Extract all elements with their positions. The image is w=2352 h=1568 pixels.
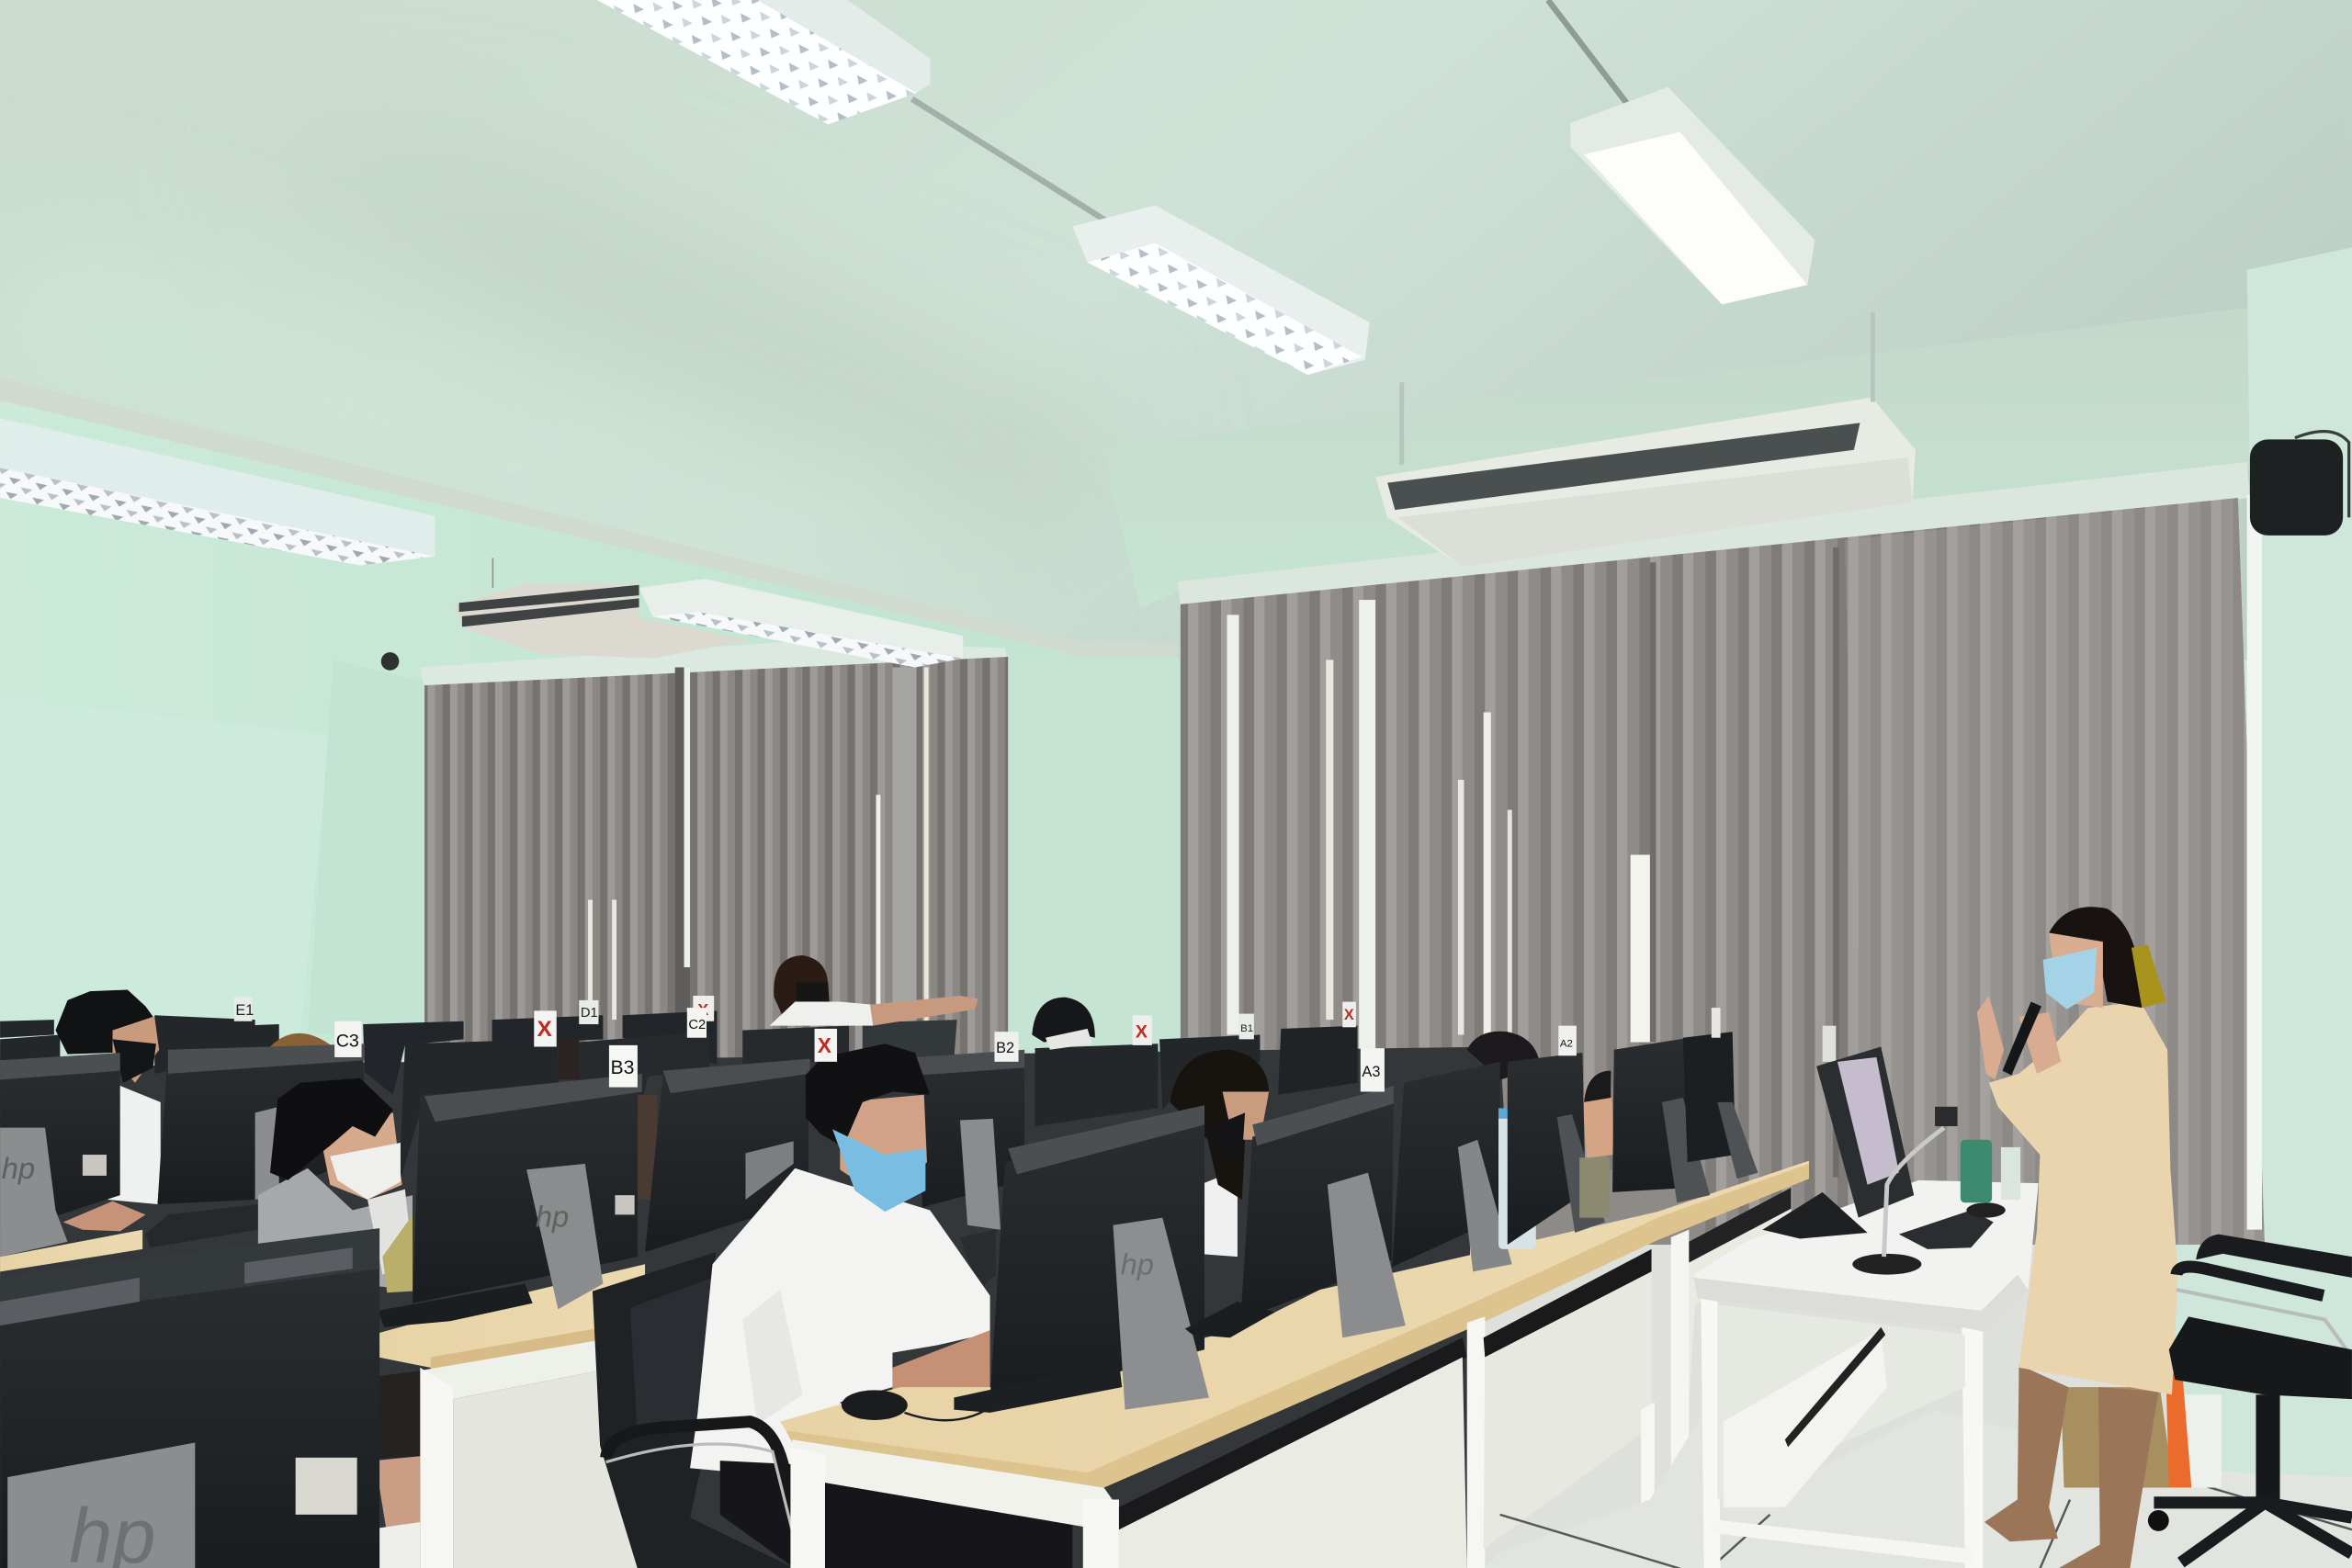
chair: front man bbox=[593, 1252, 795, 1568]
row labels: E1 bbox=[235, 1002, 254, 1019]
curtain right bbox=[1181, 498, 2265, 1252]
row labels: X bbox=[1344, 1007, 1354, 1023]
person: front man bbox=[690, 1043, 1072, 1568]
ceiling light 1 bbox=[597, 0, 930, 125]
clear water bottle bbox=[1498, 1108, 1536, 1249]
microphone stand bbox=[1852, 1107, 1958, 1275]
back row monitors bbox=[0, 1010, 1358, 1185]
person: standing woman at back bbox=[770, 955, 978, 1026]
lighter ceiling left edge bbox=[0, 240, 1050, 615]
row labels: B3 bbox=[611, 1057, 634, 1078]
teacher desk bbox=[1693, 1180, 2039, 1568]
person: man at left bbox=[55, 989, 161, 1231]
right pillar bbox=[2175, 247, 2352, 1477]
monitor: near right 1 bbox=[954, 1105, 1209, 1413]
monitor: near right 1: hp bbox=[1121, 1247, 1154, 1281]
floor bbox=[1485, 1402, 2352, 1568]
teacher face bbox=[2049, 932, 2103, 1008]
row labels: X bbox=[818, 1033, 832, 1057]
ceiling light 2 bbox=[1072, 206, 1370, 375]
teacher bbox=[1977, 907, 2178, 1568]
row labels: B2 bbox=[996, 1040, 1014, 1056]
row labels: X bbox=[1136, 1022, 1148, 1043]
row labels: B1 bbox=[1240, 1023, 1253, 1034]
row labels: X bbox=[537, 1017, 553, 1042]
row labels: D1 bbox=[581, 1006, 598, 1021]
left valance bbox=[420, 642, 1008, 687]
teacher hair bbox=[2049, 907, 2142, 1008]
air conditioner left bbox=[453, 558, 750, 659]
ceiling light 3 bbox=[1570, 87, 1815, 304]
chair armrest bbox=[606, 1422, 792, 1529]
monitor: near right 3 bbox=[1392, 1062, 1512, 1271]
row labels: C2 bbox=[688, 1018, 706, 1032]
floor base bbox=[1470, 1245, 2175, 1568]
upper wall right bbox=[1102, 308, 2257, 607]
front-left monitor bbox=[0, 1228, 379, 1568]
row labels: X bbox=[697, 1000, 708, 1019]
dark fill behind the monitors and desks bbox=[0, 1047, 1508, 1568]
ceiling shadow band bbox=[210, 135, 1140, 555]
lower left wall bbox=[0, 393, 1185, 1079]
centre pillar bbox=[1008, 660, 1182, 1079]
monitor row 3: centre left: hp bbox=[536, 1199, 569, 1233]
green bottle bbox=[1961, 1140, 2020, 1202]
teacher mask bbox=[2043, 948, 2097, 1010]
hair bow bbox=[2132, 945, 2165, 1008]
wall behind far desks bbox=[1477, 1169, 1702, 1259]
monitor row 3: centre left bbox=[413, 1074, 642, 1309]
monitor row 3: centre bbox=[645, 1059, 810, 1252]
moulding left bbox=[0, 378, 1178, 655]
office chair right bbox=[2148, 1235, 2352, 1562]
row labels: A3 bbox=[1362, 1064, 1380, 1080]
desk: front right row bbox=[780, 1161, 1809, 1568]
mouse bbox=[842, 1390, 998, 1420]
speaker bbox=[2250, 432, 2349, 536]
teacher hands bbox=[1977, 996, 2061, 1079]
right moulding bbox=[1178, 462, 2250, 604]
people behind monitors bbox=[270, 1032, 1614, 1200]
monitor: near right 2 bbox=[1185, 1086, 1406, 1337]
teacher dress bbox=[1989, 1002, 2178, 1394]
sticker bbox=[296, 1458, 357, 1515]
ceiling light 5 bbox=[639, 579, 963, 667]
left panel lighter bbox=[0, 697, 330, 1034]
left wall pier bbox=[308, 660, 427, 1034]
bags bbox=[2061, 1373, 2222, 1487]
row labels: C3 bbox=[336, 1032, 359, 1052]
curtain left bbox=[424, 657, 1008, 1079]
row labels: A2 bbox=[1560, 1039, 1573, 1050]
teacher monitor and keyboard bbox=[1762, 1047, 2006, 1249]
teacher legs bbox=[1984, 1365, 2158, 1568]
monitor row 3: behind man bbox=[915, 1050, 1024, 1290]
monitor: keyboard left bbox=[378, 1283, 533, 1327]
air conditioner right bbox=[1375, 312, 1916, 567]
row labels bbox=[234, 996, 1836, 1092]
person: woman in hoodie bbox=[258, 1078, 413, 1292]
monitor: far right row bbox=[1508, 1032, 1758, 1245]
monitor row 2 left: hp bbox=[2, 1151, 35, 1185]
security camera bbox=[381, 652, 399, 671]
monitor row 2 left bbox=[0, 1043, 366, 1257]
person: woman with black mask bbox=[1170, 1050, 1269, 1257]
ceiling light 4 bbox=[0, 418, 435, 565]
ceiling bbox=[0, 0, 2352, 660]
desk: far left bbox=[0, 1230, 142, 1271]
desk: row left bbox=[368, 1264, 645, 1568]
person: boy at back bbox=[1032, 998, 1095, 1050]
chair: back row bbox=[145, 1204, 258, 1247]
conduit bbox=[912, 0, 1635, 228]
